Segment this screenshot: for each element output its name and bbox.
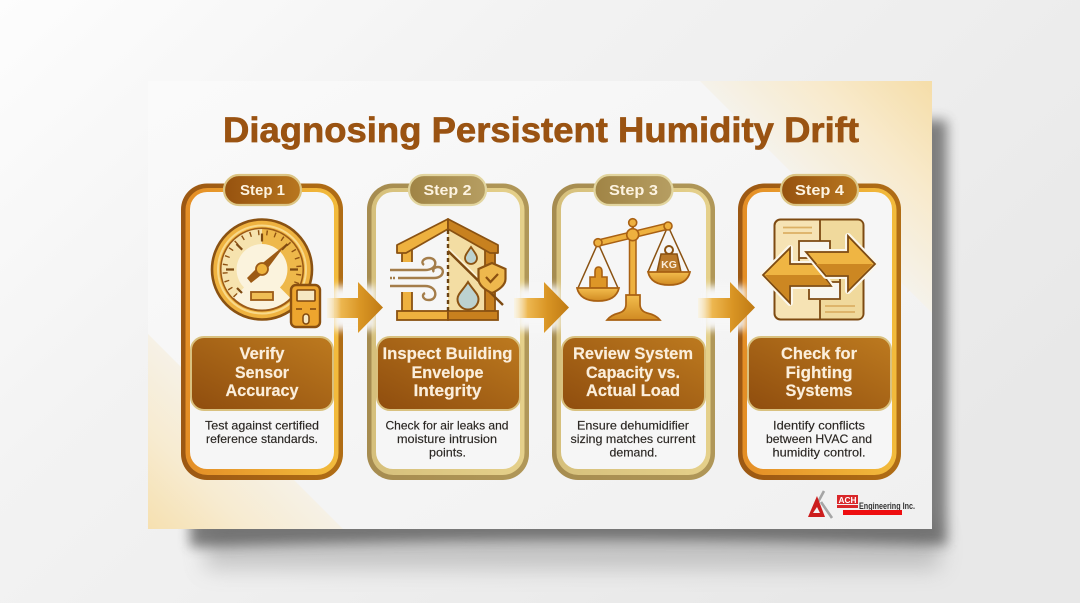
icon: house envelope with wind, moisture and shield — [386, 219, 506, 320]
icon: conflicting arrows over document — [763, 220, 875, 320]
arrow: step 1 to step 2 — [327, 282, 383, 333]
arrow: step 2 to step 3 — [514, 282, 569, 333]
step 3 heading: Capacity vs. — [586, 364, 680, 382]
step 1 heading: Accuracy — [226, 382, 299, 400]
step 4 badge: Step 4 — [795, 182, 845, 199]
step 2 description: Check for air leaks and — [386, 418, 508, 432]
step 1 description: Test against certified — [205, 418, 319, 432]
step 3 badge: Step 3 — [609, 182, 658, 199]
step 3 heading: Review System — [573, 345, 693, 363]
logo: ACH Engineering Inc.: Engineering Inc. — [859, 501, 915, 511]
panel: step 3 — [552, 175, 715, 480]
card shadow — [190, 120, 947, 569]
step 3 description — [570, 418, 696, 460]
step 4 heading — [748, 337, 891, 410]
step 2 heading: Inspect Building — [382, 345, 512, 363]
step 2 heading — [377, 337, 520, 410]
step 1 badge: Step 1 — [240, 182, 285, 199]
step 4 description — [766, 418, 872, 460]
step 2 heading: Envelope — [412, 364, 484, 382]
step 1 badge — [224, 175, 301, 205]
step 4 description: Identify conflicts — [773, 418, 865, 432]
step 2 description: moisture intrusion — [397, 432, 497, 446]
step 4 heading: Systems — [786, 382, 852, 400]
step 1 description — [205, 418, 319, 446]
step 2 heading: Integrity — [414, 382, 482, 400]
step 3 heading: Actual Load — [586, 382, 680, 400]
step 2 badge — [409, 175, 486, 205]
panel: step 1 — [181, 175, 343, 480]
step 4 description: between HVAC and — [766, 432, 872, 446]
step 3 badge — [594, 175, 672, 205]
white card — [148, 81, 932, 529]
step 1 heading: Verify — [240, 345, 285, 363]
panel: step 2 — [367, 175, 529, 480]
step 4 heading: Check for — [781, 345, 858, 363]
icon: balance scale: KG — [661, 259, 677, 271]
step 4 badge — [781, 175, 858, 205]
step 2 description: points. — [429, 446, 466, 460]
step 3 description: sizing matches current — [570, 432, 696, 446]
step 3 heading — [562, 337, 705, 410]
step 2 description — [386, 418, 508, 460]
title: Diagnosing Persistent Humidity Drift — [223, 110, 859, 150]
logo: ACH Engineering Inc. — [808, 491, 915, 518]
step 3 description: demand. — [610, 446, 658, 460]
arrow: step 3 to step 4 — [698, 282, 755, 333]
step 4 heading: Fighting — [786, 364, 852, 382]
logo: ACH Engineering Inc.: ACH — [838, 495, 856, 505]
step 1 description: reference standards. — [206, 432, 318, 446]
panel: step 4 — [738, 175, 901, 480]
step 4 description: humidity control. — [772, 446, 866, 460]
step 1 heading: Sensor — [235, 364, 290, 382]
icon: balance scale — [577, 219, 690, 320]
icon: gauge with handheld meter — [212, 220, 320, 327]
step 1 heading — [191, 337, 333, 410]
step 2 badge: Step 2 — [424, 182, 472, 199]
step 3 description: Ensure dehumidifier — [577, 418, 689, 432]
